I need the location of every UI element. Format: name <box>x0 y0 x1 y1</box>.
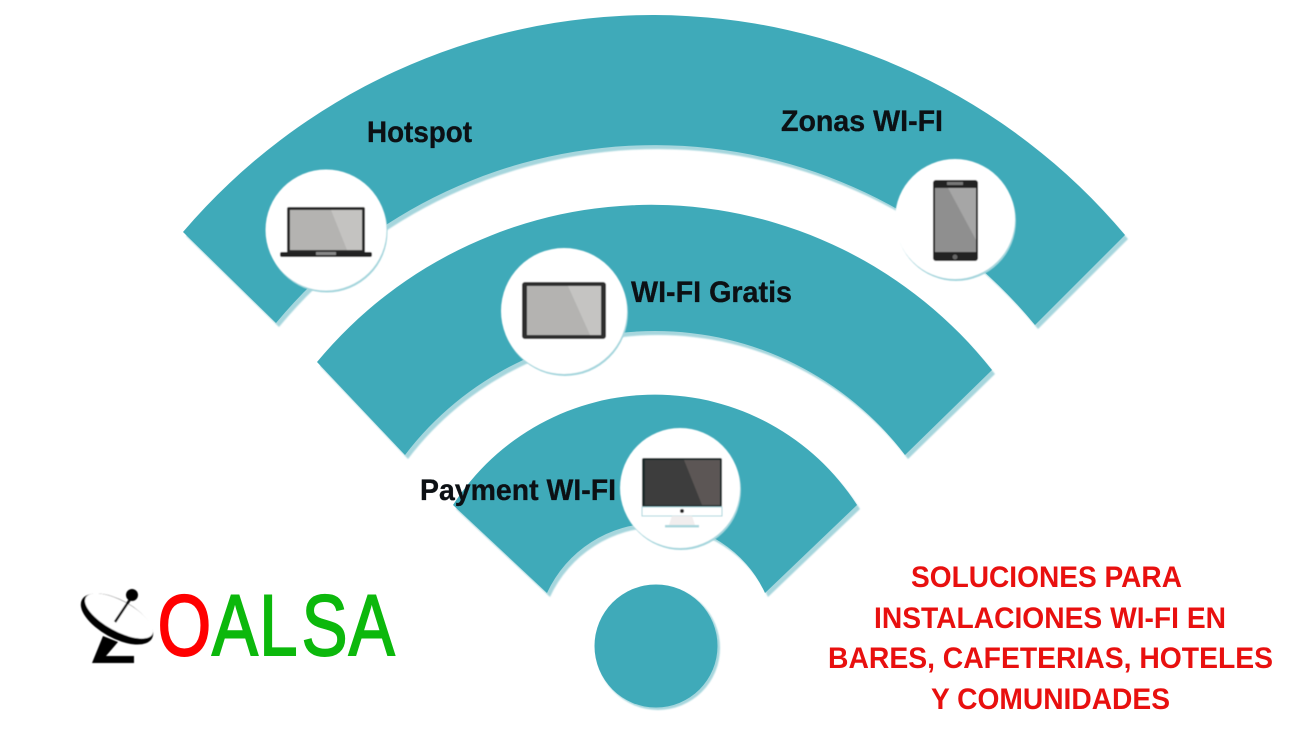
icon circle: laptop <box>266 170 388 292</box>
label: Payment WI-FI: Payment WI-FI <box>420 474 616 507</box>
wifi center dot <box>594 584 720 710</box>
red tagline <box>828 561 1273 716</box>
label: WI-FI Gratis: WI-FI Gratis <box>631 276 792 309</box>
middle wifi arc <box>317 205 995 459</box>
red tagline: INSTALACIONES WI-FI EN <box>874 602 1226 635</box>
label: Hotspot: Hotspot <box>367 116 472 149</box>
logo wordmark: O <box>158 578 211 674</box>
inner wifi arc <box>453 395 860 597</box>
icon circle: desktop monitor <box>620 428 741 550</box>
logo wordmark: A <box>212 578 258 674</box>
icon circle: tablet <box>501 248 628 376</box>
red tagline: BARES, CAFETERIAS, HOTELES <box>828 642 1273 675</box>
label: Zonas WI-FI: Zonas WI-FI <box>781 105 943 138</box>
logo: OALSA <box>73 578 395 674</box>
logo wordmark: L <box>259 578 297 674</box>
icon circle: smartphone <box>895 159 1016 281</box>
logo wordmark: A <box>349 578 395 674</box>
outer wifi arc <box>183 15 1128 329</box>
red tagline: Y COMUNIDADES <box>931 683 1170 716</box>
red tagline: SOLUCIONES PARA <box>911 561 1182 594</box>
icon: satellite dish <box>73 583 161 663</box>
logo wordmark: S <box>302 578 347 674</box>
